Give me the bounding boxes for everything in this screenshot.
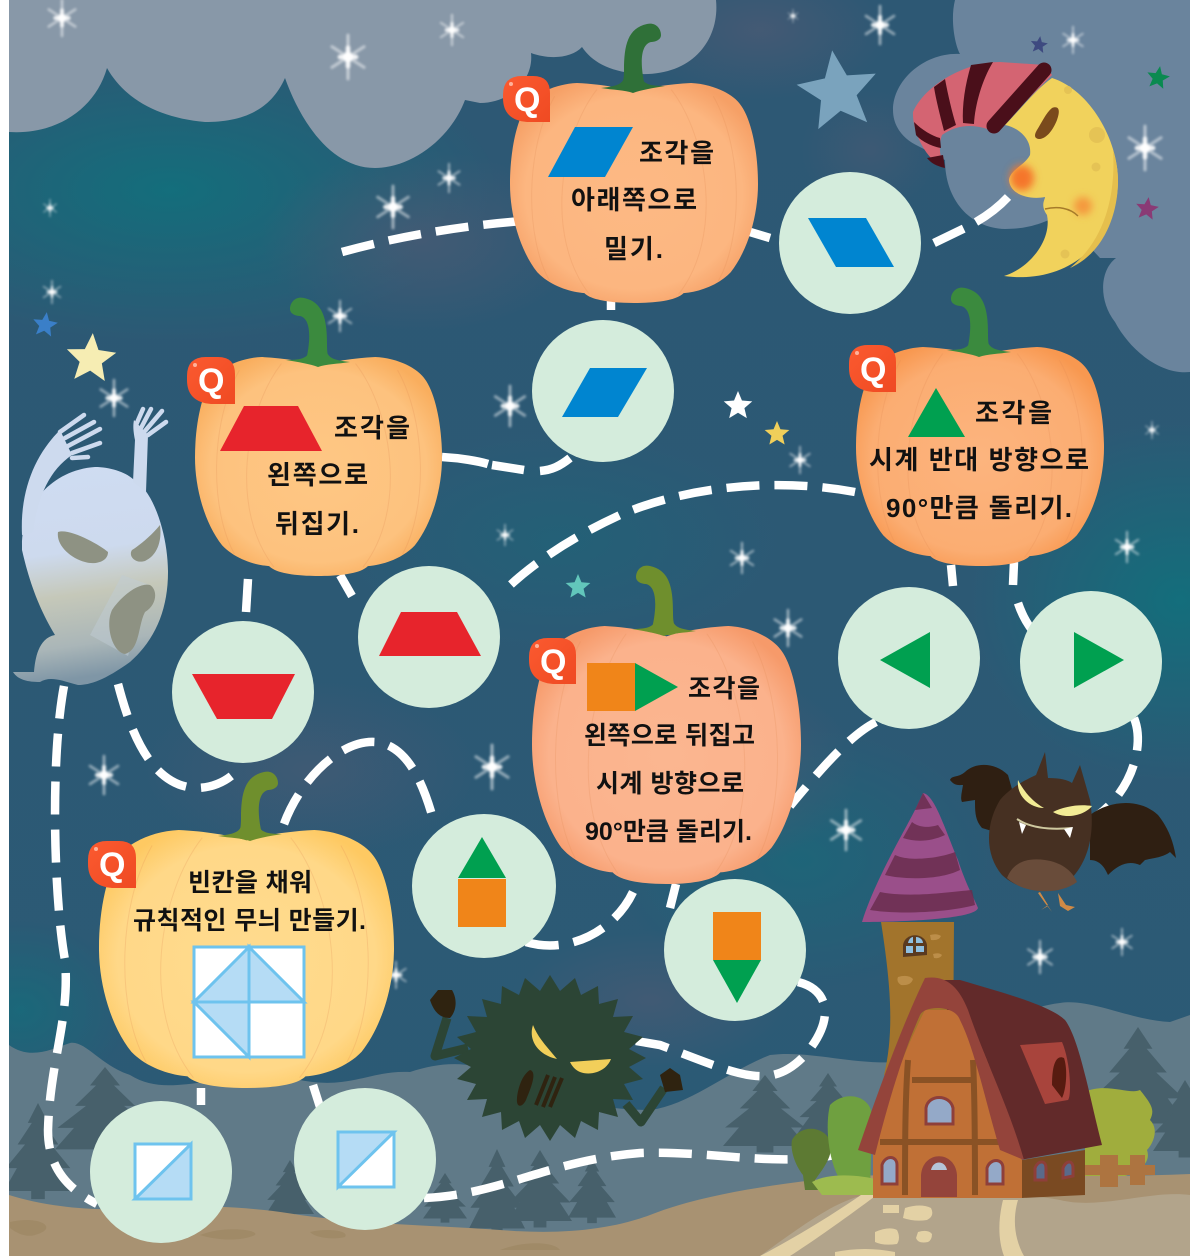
pumpkin 2 left bbox=[195, 298, 442, 576]
house windows and door bbox=[882, 1098, 1073, 1184]
text: pumpkin 4: 시계 방향으로 bbox=[596, 770, 744, 798]
bushes beside house bbox=[792, 1088, 1155, 1195]
icons: trapezoids bbox=[192, 406, 481, 719]
text: pumpkin 3: 조각을 bbox=[975, 398, 1052, 428]
pumpkin 4 centre bbox=[532, 566, 801, 884]
text: pumpkin 1 bbox=[571, 138, 714, 264]
text: pumpkin 3: 90°만큼 돌리기. bbox=[886, 493, 1072, 523]
text: pumpkin 5: 빈칸을 채워 bbox=[188, 869, 312, 897]
text: pumpkin 4: 조각을 bbox=[688, 675, 760, 703]
moon with night cap bbox=[913, 62, 1118, 277]
icons: parallelograms bbox=[548, 127, 894, 417]
ghost right arm bbox=[133, 409, 166, 492]
icon: pattern grid bbox=[194, 947, 304, 1057]
answer circles bbox=[90, 172, 1162, 1243]
text: pumpkin 1: 조각을 bbox=[639, 138, 714, 168]
bat bbox=[950, 752, 1176, 912]
text: pumpkin 4 bbox=[584, 675, 760, 846]
pumpkin 3 right bbox=[856, 288, 1104, 566]
tower bbox=[881, 922, 954, 1075]
forest trees bbox=[4, 1027, 1200, 1236]
text: pumpkin 1: 밀기. bbox=[604, 234, 663, 264]
house roof bbox=[944, 980, 1102, 1160]
roof ridge bbox=[858, 977, 1024, 1160]
pumpkin body bbox=[510, 83, 758, 303]
Q badges: Q bbox=[99, 846, 125, 884]
text: pumpkin 2: 조각을 bbox=[334, 413, 410, 443]
Q badges: Q bbox=[514, 81, 540, 119]
Q badges: Q bbox=[860, 351, 886, 389]
Q badges: Q bbox=[198, 362, 224, 400]
furry monster bbox=[430, 975, 683, 1141]
cloud: top left bbox=[9, 0, 716, 168]
icons: orange squares bbox=[458, 663, 761, 960]
cloud: top right behind moon bbox=[893, 0, 1190, 372]
text: pumpkin 3: 시계 반대 방향으로 bbox=[869, 445, 1089, 475]
text: pumpkin 3 bbox=[869, 398, 1089, 523]
sparkle stars bbox=[44, 0, 1161, 988]
pumpkin 1 top bbox=[510, 24, 758, 303]
tower window bbox=[903, 935, 927, 957]
Q badges bbox=[88, 76, 896, 888]
text: pumpkin 2 bbox=[267, 413, 410, 539]
text: pumpkin 1: 아래쪽으로 bbox=[571, 185, 697, 215]
icons: triangles bbox=[458, 388, 1124, 1003]
text: pumpkin 5: 규칙적인 무늬 만들기. bbox=[133, 907, 366, 935]
house front wall bbox=[873, 1010, 1022, 1198]
dormer window bbox=[1020, 1042, 1070, 1104]
ground bbox=[9, 1174, 1190, 1256]
pumpkin 5 yellow bbox=[99, 772, 394, 1088]
text: pumpkin 2: 뒤집기. bbox=[275, 509, 359, 539]
coloured stars bbox=[31, 35, 1171, 598]
text: pumpkin 2: 왼쪽으로 bbox=[267, 460, 368, 490]
text: pumpkin 5 bbox=[133, 869, 366, 935]
mountains bbox=[9, 1002, 1190, 1256]
stem bbox=[623, 24, 661, 82]
dashed game path bbox=[48, 197, 1138, 1204]
icon: option square upper left filled bbox=[338, 1132, 394, 1187]
Q badges: Q bbox=[540, 643, 566, 681]
tower roof bbox=[862, 793, 978, 922]
ground highlights and road bbox=[10, 1190, 1190, 1256]
ghost left arm bbox=[22, 415, 100, 535]
text: pumpkin 4: 90°만큼 돌리기. bbox=[585, 818, 752, 846]
wizard house bbox=[792, 793, 1155, 1198]
ghost bbox=[13, 409, 168, 685]
icon: option square lower right filled bbox=[135, 1144, 191, 1199]
text: pumpkin 4: 왼쪽으로 뒤집고 bbox=[584, 722, 755, 750]
